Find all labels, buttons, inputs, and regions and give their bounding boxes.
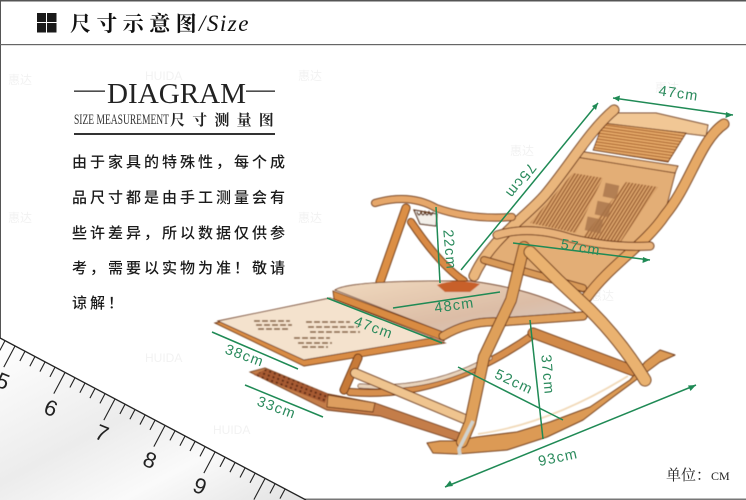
- foot massager: [250, 368, 460, 441]
- watermarks: 惠达: [8, 73, 32, 87]
- left rail: [474, 110, 614, 276]
- heading: diagram: DIAGRAM: [107, 79, 246, 110]
- dimension: rocker length 93cm: [445, 385, 696, 487]
- ruler numbers: 7: [91, 419, 112, 447]
- dimension: rocker length 93cm: 93cm: [537, 446, 580, 470]
- ruler numbers: 9: [189, 472, 210, 500]
- lower rail: [484, 260, 583, 288]
- text block: note: 考，需要以实物为准！敬请: [72, 259, 288, 277]
- ruler: [0, 338, 306, 500]
- watermarks: 惠达: [590, 289, 614, 303]
- dimension: footrest length 47cm: 47cm: [352, 314, 395, 343]
- dimension: arm span 57cm: 57cm: [559, 237, 602, 259]
- heading: diagram: SIZE MEASUREMENT: [74, 112, 169, 128]
- seat side rail: [443, 316, 583, 336]
- unit label: 单位：CM: [666, 464, 730, 485]
- watermarks: [8, 69, 679, 437]
- dimension: rocker depth 52cm: 52cm: [492, 367, 535, 398]
- dimension: backrest height 75cm: 75cm: [501, 160, 539, 201]
- dimension: rocker height 37cm: 37cm: [537, 354, 557, 395]
- right armrest: [497, 231, 650, 246]
- dimension: backrest width 47cm: [613, 83, 733, 118]
- chair illustration: [215, 110, 724, 455]
- watermarks: HUIDA: [145, 69, 182, 83]
- watermarks: 惠达: [510, 144, 534, 158]
- dimension: footrest width 38cm: [212, 332, 298, 371]
- left armrest: [375, 199, 512, 218]
- left ratchet: [414, 210, 437, 226]
- windows: [586, 127, 605, 150]
- curved back leg: [530, 252, 645, 380]
- header bar: [0, 8, 746, 45]
- text block: note: [72, 154, 288, 312]
- dimension: seat depth 48cm: 48cm: [433, 295, 475, 317]
- watermarks: HUIDA: [213, 423, 250, 437]
- backrest: [474, 110, 724, 297]
- dimension: arm height 22cm: [436, 207, 459, 283]
- dimension: rocker height 37cm: [530, 320, 557, 439]
- front rocker: [427, 350, 675, 454]
- ruler numbers: 6: [40, 394, 61, 422]
- top bar: [600, 113, 708, 136]
- watermarks: 惠达: [298, 69, 322, 83]
- watermarks: HUIDA: [145, 351, 182, 365]
- seat: [333, 281, 582, 341]
- title: 尺寸示意图/Size: [70, 8, 250, 38]
- dimension: massager 33cm: [245, 385, 323, 423]
- back panel: [486, 155, 676, 292]
- dimension: backrest width 47cm: 47cm: [658, 83, 700, 105]
- ruler numbers: [0, 367, 210, 500]
- dimension: arm span 57cm: [513, 237, 650, 263]
- watermarks: 惠达: [8, 211, 32, 225]
- footrest panel: [215, 298, 445, 366]
- text block: note: 品尺寸都是由手工测量会有: [72, 190, 288, 206]
- dimension: footrest width 38cm: 38cm: [223, 342, 266, 371]
- text block: note: 谅解！: [72, 294, 126, 312]
- heading: diagram: [74, 79, 281, 135]
- cross bar rear: [533, 333, 634, 371]
- icon: four squares: [37, 13, 56, 32]
- mid bar: [576, 151, 678, 173]
- dimension: rocker depth 52cm: [458, 367, 563, 420]
- heading: diagram: 尺寸测量图: [170, 109, 281, 130]
- right rail: [587, 124, 724, 297]
- ruler numbers: 8: [139, 446, 160, 474]
- far rocker: [350, 335, 533, 393]
- left arm legs: [380, 208, 464, 282]
- dimension: seat depth 48cm: [393, 292, 500, 317]
- dimension: arm height 22cm: 22cm: [439, 229, 459, 270]
- watermarks: 惠达: [655, 81, 679, 95]
- calligraphy panel: [585, 183, 619, 234]
- footrest legs: [344, 358, 467, 420]
- dimension: footrest length 47cm: [327, 298, 442, 343]
- dimension: backrest height 75cm: [461, 103, 598, 270]
- text block: note: 由于家具的特殊性，每个成: [72, 154, 288, 171]
- dimension: massager 33cm: 33cm: [255, 394, 298, 423]
- watermarks: 惠达: [298, 211, 322, 225]
- headrest: [593, 123, 686, 162]
- main front leg: [459, 247, 524, 455]
- text block: note: 些许差异，所以数据仅供参: [72, 224, 288, 242]
